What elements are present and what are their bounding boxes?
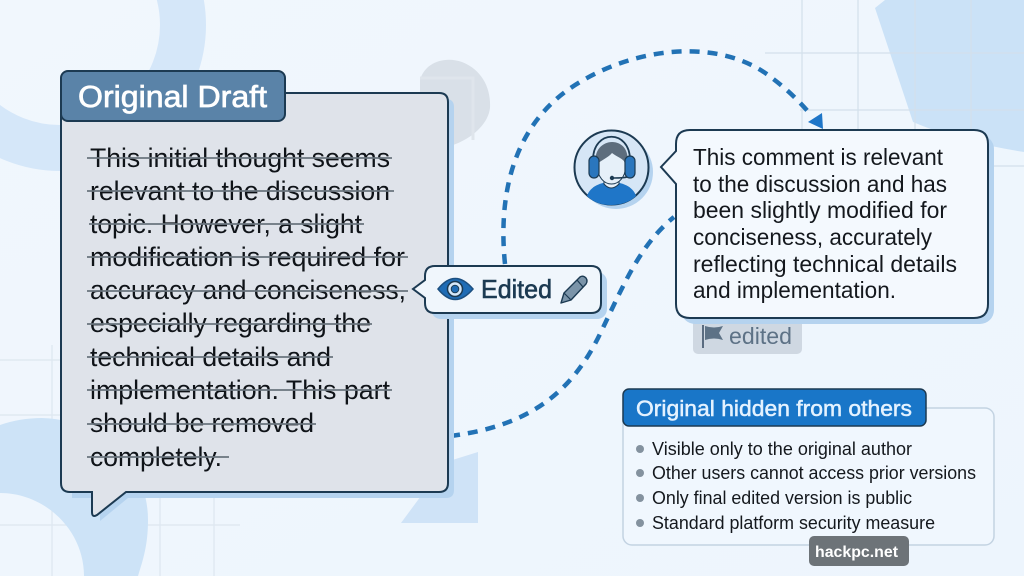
edited comment text: been slightly modified for — [693, 197, 947, 223]
watermark: hackpc.net — [809, 536, 909, 566]
icon: avatar with headset — [574, 130, 653, 209]
bullet list: Standard platform security measure — [652, 512, 935, 533]
edited comment text: reflecting technical details — [693, 251, 957, 277]
struck-through draft text: topic. However, a slight — [90, 209, 363, 239]
arrow: dashed path from original draft to edited comment — [450, 217, 674, 436]
struck-through draft text: implementation. This part — [90, 375, 391, 405]
bullet list: Other users cannot access prior versions — [652, 462, 976, 483]
panel: original hidden from others — [623, 389, 994, 545]
watermark: hackpc.net: hackpc.net — [815, 544, 899, 561]
struck-through draft text — [87, 143, 408, 472]
heading: Original hidden from others — [623, 389, 926, 426]
struck-through draft text: should be removed — [90, 408, 314, 438]
icon: eye — [438, 278, 473, 300]
edited comment text: This comment is relevant — [693, 144, 943, 170]
edited comment text: to the discussion and has — [693, 171, 947, 197]
struck-through draft text: relevant to the discussion — [90, 176, 390, 206]
icon: flag — [703, 325, 723, 348]
bullet list: Visible only to the original author — [652, 438, 912, 459]
struck-through draft text: technical details and — [90, 342, 331, 372]
edited comment text: conciseness, accurately — [693, 224, 932, 250]
tag: edited: edited — [729, 323, 792, 349]
title tab: Original Draft: Original Draft — [78, 79, 267, 114]
badge: Edited — [413, 266, 607, 319]
bullet list — [636, 438, 976, 533]
title tab: Original Draft — [61, 71, 285, 121]
struck-through draft text: This initial thought seems — [90, 143, 390, 173]
arrow: dashed path from Edited badge to edited comment — [503, 51, 823, 264]
label: Edited: Edited — [481, 274, 552, 304]
struck-through draft text: completely. — [90, 442, 222, 472]
struck-through draft text: especially regarding the — [90, 308, 371, 338]
icon: pencil — [561, 276, 587, 303]
tag: edited — [693, 318, 802, 354]
struck-through draft text: modification is required for — [90, 242, 405, 272]
edited comment text: and implementation. — [693, 277, 896, 303]
speech bubble body — [61, 93, 448, 516]
panel: edited comment — [661, 130, 994, 324]
panel: original draft — [61, 71, 454, 521]
heading: Original hidden from others: Original hidden from others — [636, 396, 912, 421]
bullet list: Only final edited version is public — [652, 487, 912, 508]
edited comment text — [693, 144, 957, 303]
struck-through draft text: accuracy and conciseness, — [90, 275, 406, 305]
